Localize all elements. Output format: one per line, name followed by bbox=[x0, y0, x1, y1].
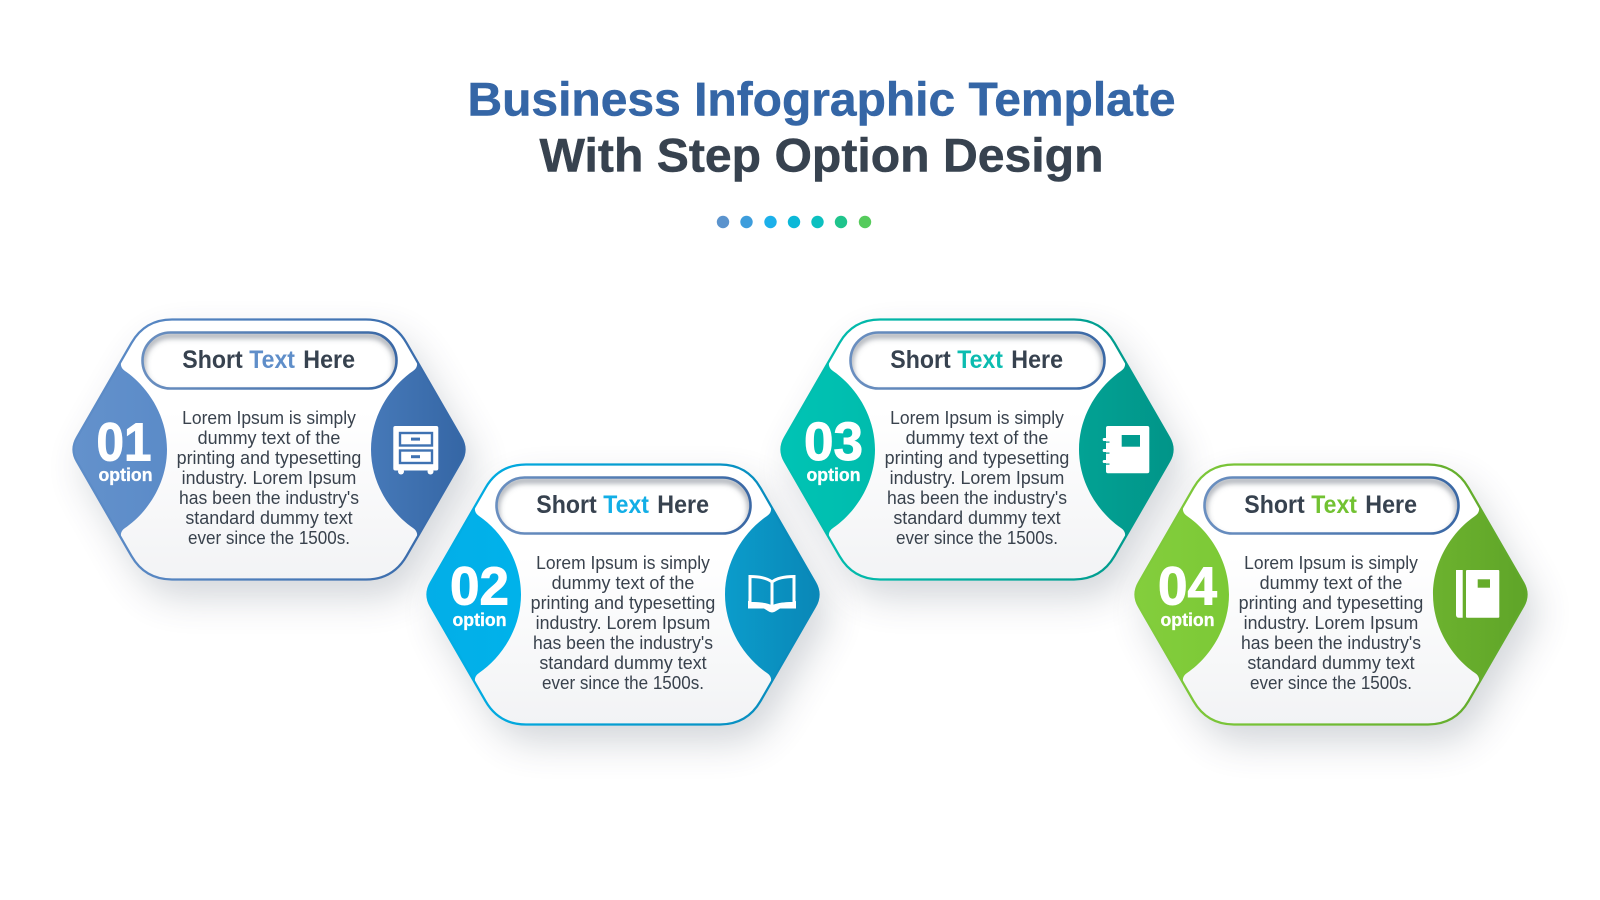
panel: option 01 bbox=[74, 320, 474, 598]
heading text bbox=[182, 346, 355, 374]
hexagon outline bbox=[1136, 464, 1526, 724]
heading text: Text bbox=[603, 491, 650, 519]
option number: option bbox=[452, 609, 506, 630]
right icon segment bbox=[1433, 505, 1526, 684]
body text: Lorem Ipsum is simply bbox=[182, 408, 356, 428]
body text: dummy text of the bbox=[1260, 573, 1402, 593]
hexagon body bbox=[428, 464, 818, 724]
body text: industry. Lorem Ipsum bbox=[182, 468, 356, 488]
option number: option bbox=[98, 464, 152, 485]
hexagon body bbox=[74, 320, 464, 580]
hexagon body bbox=[1136, 464, 1526, 724]
body text: standard dummy text bbox=[893, 508, 1061, 528]
panel: option 04 bbox=[1136, 464, 1536, 742]
heading pill bbox=[496, 478, 750, 540]
right icon segment bbox=[1079, 360, 1172, 539]
body text: ever since the 1500s. bbox=[896, 528, 1058, 548]
body text bbox=[177, 408, 361, 548]
heading text: Here bbox=[303, 346, 355, 374]
option number: 03 bbox=[804, 412, 863, 472]
body text: dummy text of the bbox=[552, 573, 694, 593]
body text bbox=[1239, 553, 1423, 693]
icon: spiral notebook bbox=[1103, 426, 1149, 473]
heading text: Short bbox=[182, 346, 243, 374]
hexagon body bbox=[782, 320, 1172, 580]
hexagon outline bbox=[74, 320, 464, 580]
option number: 04 bbox=[1158, 556, 1217, 616]
decorative dot row bbox=[717, 216, 871, 228]
icon: closed book bbox=[1456, 570, 1499, 618]
heading text: Text bbox=[249, 346, 296, 374]
title: With Step Option Design bbox=[540, 128, 1104, 182]
heading text: Here bbox=[1011, 346, 1063, 374]
option number: option bbox=[806, 464, 860, 485]
body text: dummy text of the bbox=[198, 428, 340, 448]
heading text: Here bbox=[1365, 491, 1417, 519]
heading text bbox=[536, 491, 709, 519]
body text: printing and typesetting bbox=[885, 448, 1069, 468]
heading text: Text bbox=[957, 346, 1004, 374]
right icon segment bbox=[371, 360, 464, 539]
body text: standard dummy text bbox=[539, 653, 707, 673]
body text: ever since the 1500s. bbox=[542, 673, 704, 693]
body text: Lorem Ipsum is simply bbox=[536, 553, 710, 573]
body text: has been the industry's bbox=[533, 633, 713, 653]
body text: printing and typesetting bbox=[531, 593, 715, 613]
body text: ever since the 1500s. bbox=[1250, 673, 1412, 693]
heading pill bbox=[1204, 478, 1458, 540]
heading pill bbox=[850, 332, 1104, 394]
body text: industry. Lorem Ipsum bbox=[1244, 613, 1418, 633]
left number segment bbox=[428, 505, 521, 684]
heading pill bbox=[142, 332, 396, 394]
body text bbox=[885, 408, 1069, 548]
panel: option 02 bbox=[428, 464, 828, 742]
icon: filing cabinet bbox=[393, 426, 438, 474]
body text: printing and typesetting bbox=[1239, 593, 1423, 613]
heading text: Short bbox=[890, 346, 951, 374]
heading text: Short bbox=[536, 491, 597, 519]
icon: open book bbox=[748, 576, 796, 612]
body text bbox=[531, 553, 715, 693]
body text: printing and typesetting bbox=[177, 448, 361, 468]
option number: option bbox=[1160, 609, 1214, 630]
left number segment bbox=[74, 360, 167, 539]
heading text: Text bbox=[1311, 491, 1358, 519]
heading text bbox=[890, 346, 1063, 374]
body text: industry. Lorem Ipsum bbox=[890, 468, 1064, 488]
body text: Lorem Ipsum is simply bbox=[890, 408, 1064, 428]
option number: 02 bbox=[450, 556, 509, 616]
body text: industry. Lorem Ipsum bbox=[536, 613, 710, 633]
hexagon outline bbox=[782, 320, 1172, 580]
title bbox=[468, 72, 1176, 182]
body text: standard dummy text bbox=[1247, 653, 1415, 673]
body text: has been the industry's bbox=[887, 488, 1067, 508]
heading text: Short bbox=[1244, 491, 1305, 519]
heading text: Here bbox=[657, 491, 709, 519]
body text: Lorem Ipsum is simply bbox=[1244, 553, 1418, 573]
right icon segment bbox=[725, 505, 818, 684]
body text: dummy text of the bbox=[906, 428, 1048, 448]
body text: ever since the 1500s. bbox=[188, 528, 350, 548]
option number: 01 bbox=[96, 412, 152, 472]
panel: option 03 bbox=[782, 320, 1182, 598]
left number segment bbox=[1136, 505, 1229, 684]
body text: has been the industry's bbox=[1241, 633, 1421, 653]
body text: has been the industry's bbox=[179, 488, 359, 508]
heading text bbox=[1244, 491, 1417, 519]
hexagon outline bbox=[428, 464, 818, 724]
title: Business Infographic Template bbox=[468, 72, 1176, 126]
body text: standard dummy text bbox=[185, 508, 353, 528]
left number segment bbox=[782, 360, 875, 539]
